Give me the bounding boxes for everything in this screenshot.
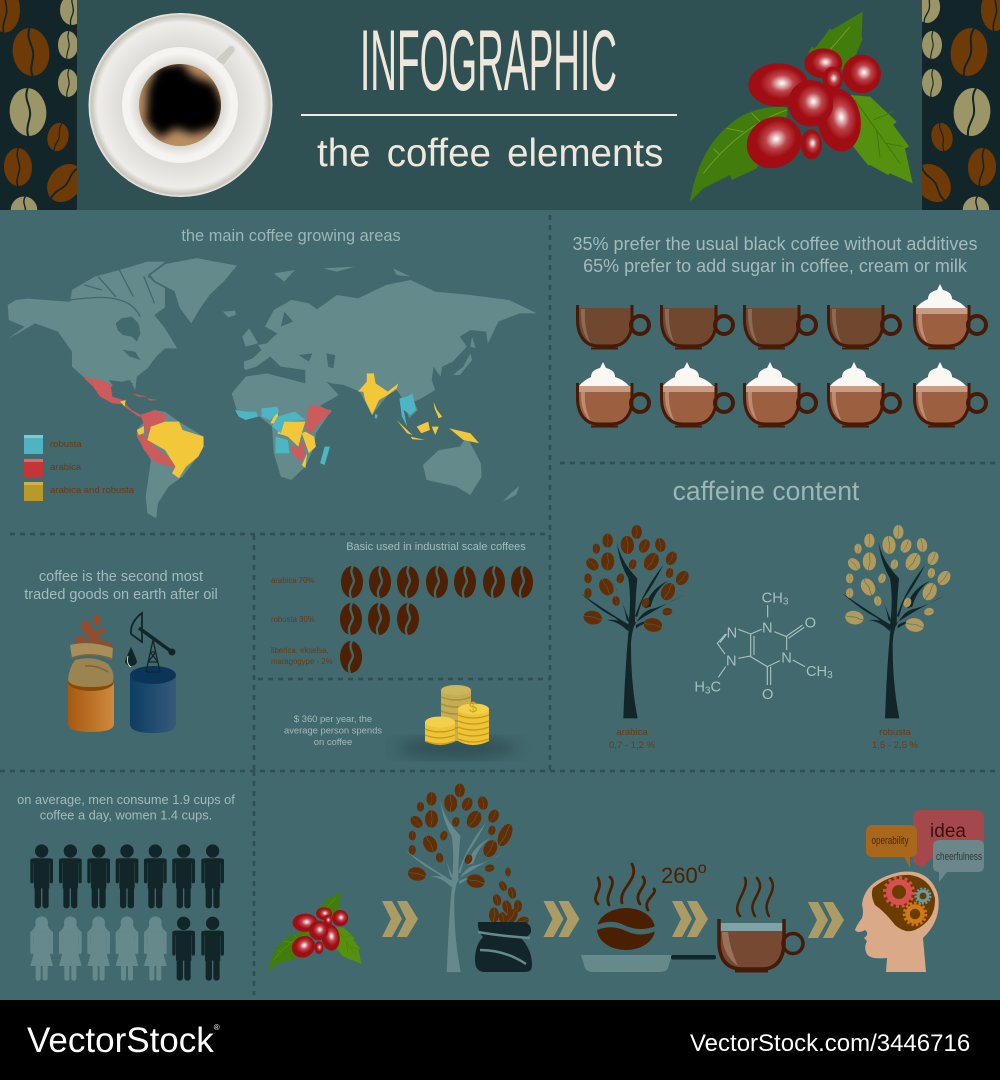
row: arabica 70% [271,566,533,598]
row: robusta 30%: robusta 30% [271,615,315,624]
coffee regions [83,377,332,468]
text: yearly spend: average person spends [284,724,382,736]
text: traded goods: traded goods on earth after oil [24,587,218,603]
text: 260 degrees: o [698,860,707,877]
caffeine molecule: O [762,687,773,703]
icon: oil pump on barrel [125,613,176,733]
icon: coffee bag on barrel [68,614,114,732]
callout: cheerfulness: cheerfulness [936,851,982,863]
tree: robusta [842,525,953,718]
icon: coffee tree [405,784,513,972]
heading: growing areas: the main coffee growing areas [181,227,401,245]
panel: caffeine content [581,476,953,751]
caffeine molecule: 3 [783,596,789,607]
image url: VectorStock.com/3446716 [690,1030,970,1057]
cups row 2 [578,362,986,428]
panel: process flow [268,784,984,972]
panel: preference cups [573,234,986,428]
panel: traded goods [24,569,218,733]
legend: arabica and robusta: arabica and robusta [50,485,135,496]
label: robusta: robusta [879,727,912,738]
text: coffee preference: 35% prefer the usual black coffee without additives [573,234,977,254]
footer watermark bar [0,1000,1000,1080]
icon: coffee cup from above [88,13,272,197]
icon: steaming cup [719,878,803,972]
brand name: ® [214,1023,220,1032]
caffeine molecule: N [762,621,773,637]
heading: industrial coffees: Basic used in industrial scale coffees [346,541,526,553]
heading: caffeine content: caffeine content [673,476,860,506]
panel: industrial coffees [271,541,533,673]
legend: arabica: arabica [50,462,82,473]
panel: consumption by gender [17,792,235,981]
caffeine molecule: H [694,680,705,696]
right bean strip [922,0,1000,210]
caffeine molecule: C [710,680,721,696]
callout: operability [866,825,917,868]
text: 260 degrees: 260 [661,863,698,888]
callout: operability: operability [872,835,909,847]
panel: header [0,0,1000,224]
text: yearly spend: $ 360 per year, the [294,713,372,724]
row: arabica 70%: arabica 70% [271,576,314,585]
label: arabica: 0,7 - 1,2 % [609,740,656,751]
caffeine molecule: 3 [827,670,833,681]
text: consumption: on average, men consume 1.9 cups of [17,792,235,807]
label: arabica: arabica [616,727,648,738]
arrow: chevrons 3 [672,901,708,937]
legend: robusta: robusta [50,439,82,450]
callout: idea [913,810,984,868]
icon: bag of beans [475,822,532,972]
tree: arabica [581,525,691,718]
caffeine molecule: N [726,653,737,669]
row: liberica 2%: liberica, ekselsa, [271,646,329,655]
callout: idea: idea [930,821,966,842]
world map [8,257,537,518]
greenland [149,257,239,325]
caffeine molecule [694,590,833,703]
caffeine molecule: CH [806,664,827,680]
text: traded goods: coffee is the second most [39,569,203,585]
arrow: chevrons 2 [544,901,580,937]
cups row 1 [578,284,986,350]
icon: coin stacks [397,685,517,759]
row: liberica 2%: maragogype - 2% [271,657,333,666]
panel: growing areas map [8,227,537,518]
legend [24,435,135,501]
caffeine molecule: CH [762,590,783,606]
text: yearly spend: on coffee [314,736,352,747]
icon: coffee berries [690,12,913,202]
caffeine molecule: N [727,625,737,641]
icon: coin stacks: $ [469,699,478,716]
caffeine molecule: O [805,616,816,632]
row: liberica 2% [271,641,362,673]
panel: header: INFOGRAPHIC [360,13,617,109]
row: robusta 30% [271,603,419,635]
caffeine molecule: N [781,651,792,667]
icon: roasting bean in pan [581,864,716,972]
caffeine molecule: 3 [705,686,711,697]
text: coffee preference: 65% prefer to add sugar in coffee, cream or milk [583,256,968,276]
callout: cheerfulness [933,840,984,882]
panel: yearly spend [284,685,517,759]
arrow: chevrons 1 [382,901,418,937]
pictogram: men and women [30,844,224,981]
dashed panel dividers [0,215,1000,995]
icon: head with gears [855,871,939,972]
icon: small berries [268,892,362,972]
subtitle: the coffee elements [317,132,663,175]
brand name: VectorStock [27,1021,214,1060]
arrow: chevrons 4 [808,902,844,938]
text: consumption: coffee a day, women 1.4 cups. [40,808,212,822]
left bean strip [0,0,77,210]
label: robusta: 1,5 - 2,5 % [872,740,919,751]
